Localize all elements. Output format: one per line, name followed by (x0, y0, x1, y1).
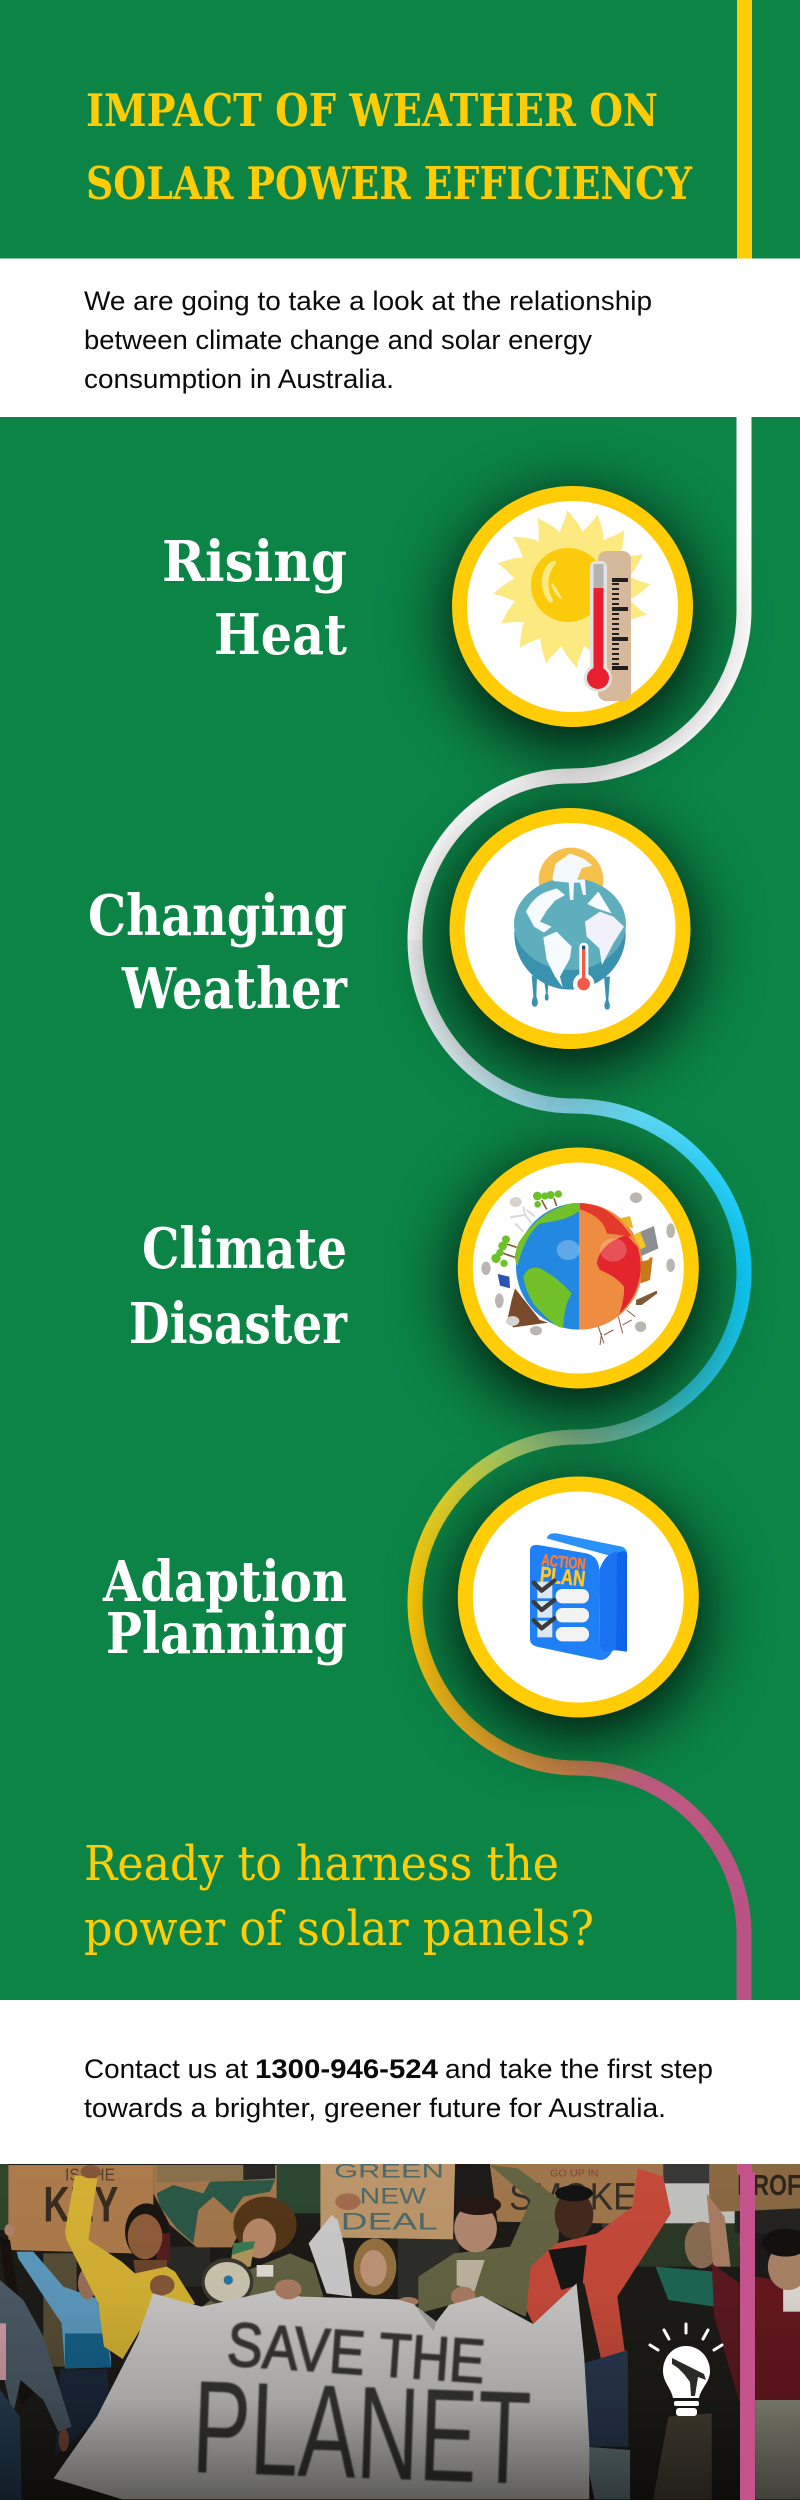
icon circle 1: sun and thermometer (460, 494, 686, 720)
bulb rays (650, 2324, 722, 2350)
action plan label: ACTION (541, 1552, 586, 1574)
front sheet (530, 1545, 613, 1660)
man with glasses (418, 2165, 560, 2317)
denim woman at left (0, 2237, 72, 2500)
intro text panel (0, 258, 800, 417)
heading: Adaption Planning: Planning (106, 1601, 347, 1667)
small thermometer (573, 943, 594, 995)
contact text (84, 2054, 713, 2123)
sign: go up in smoke: GO UP IN (550, 2167, 598, 2179)
trees and turbines (491, 1190, 562, 1267)
bulb (663, 2346, 710, 2398)
icon circle 3: split earth (465, 1155, 691, 1381)
mountain and solar panel (498, 1274, 548, 1327)
sign: go up in smoke (490, 2164, 663, 2224)
green background (0, 0, 800, 2000)
intro paragraph: We are going to take a look at the relationship (84, 286, 652, 316)
contact text: and take the first step (445, 2054, 713, 2084)
person in plaid (755, 2229, 800, 2499)
intro paragraph: consumption in Australia. (84, 364, 394, 394)
contact text: towards a brighter, greener future for Australia. (84, 2093, 666, 2123)
woman with raised fist (309, 2193, 418, 2306)
banner lettering: SAVE THE (225, 2310, 487, 2397)
call to action heading: power of solar panels? (84, 1901, 594, 1957)
icon: kangaroo light bulb logo (650, 2324, 722, 2416)
heading: Climate Disaster (129, 1216, 348, 1357)
icon circle 2: melting globe (457, 816, 683, 1042)
sign: world map (153, 2165, 277, 2247)
contact text: 1300-946-524 (255, 2054, 438, 2084)
contact text: Contact us at (84, 2054, 249, 2084)
sign: go up in smoke: SMOKE (509, 2175, 637, 2218)
setting sun (539, 848, 603, 912)
winding gradient path (415, 417, 744, 2000)
circle shadows (447, 498, 703, 1737)
globe (514, 878, 626, 1010)
heading: Adaption Planning (102, 1549, 347, 1667)
heading: Climate Disaster: Disaster (129, 1291, 348, 1357)
thermometer (584, 551, 631, 701)
sign: green new deal: NEW (360, 2184, 426, 2209)
clouds (481, 1192, 675, 1335)
heading: Changing Weather: Weather (121, 956, 348, 1022)
banner (54, 2275, 589, 2499)
sign: is the key: IS THE (65, 2165, 115, 2185)
dark photo overlay (0, 2164, 800, 2500)
sun (493, 510, 651, 668)
heading: Rising Heat (162, 529, 347, 668)
person in blue (4, 2224, 111, 2457)
megaphone (201, 2241, 255, 2306)
sign: is the key: KEY (43, 2177, 118, 2233)
right side of crowd (54, 2160, 800, 2499)
polar bear (552, 853, 592, 900)
heading: Rising Heat: Rising (162, 529, 347, 595)
boy with megaphone (200, 2197, 323, 2308)
yellow vertical bar (737, 0, 752, 259)
intro paragraph: between climate change and solar energy (84, 325, 592, 355)
industry and dead trees (598, 1216, 658, 1345)
sign: green new deal: DEAL (341, 2208, 438, 2235)
action plan label: PLAN (539, 1562, 587, 1591)
sign: far right (709, 2164, 800, 2212)
fold (599, 1552, 617, 1653)
title: SOLAR POWER EFFICIENCY (86, 157, 693, 210)
left side of crowd (0, 2163, 323, 2500)
heading: Rising Heat: Heat (214, 602, 347, 668)
header panel (86, 0, 752, 259)
title (86, 84, 693, 210)
sign: green new deal (320, 2160, 455, 2239)
kangaroo silhouette (672, 2358, 706, 2396)
sign: green new deal: GREEN (334, 2160, 444, 2182)
heading: Climate Disaster: Climate (142, 1216, 347, 1282)
checklist (534, 1581, 589, 1641)
title: IMPACT OF WEATHER ON (86, 84, 658, 137)
heading: Changing Weather: Changing (88, 883, 347, 949)
sign: is the key (8, 2165, 153, 2254)
earth (513, 1202, 643, 1330)
woman in yellow (65, 2165, 195, 2359)
man in red hoodie (527, 2168, 671, 2499)
protest photo (0, 2160, 800, 2500)
heading: Changing Weather (88, 883, 348, 1022)
icon circle 4: action plan document (465, 1484, 691, 1710)
person in green shirt (653, 2193, 740, 2499)
contact panel (0, 2000, 800, 2164)
call to action heading (84, 1836, 594, 1957)
heading: Adaption Planning: Adaption (102, 1549, 347, 1615)
back sheet (547, 1533, 627, 1652)
pink path continuation (737, 2164, 755, 2500)
action plan label (539, 1552, 587, 1591)
banner lettering (197, 2321, 531, 2484)
intro paragraph (84, 286, 652, 394)
call to action heading: Ready to harness the (84, 1836, 559, 1892)
